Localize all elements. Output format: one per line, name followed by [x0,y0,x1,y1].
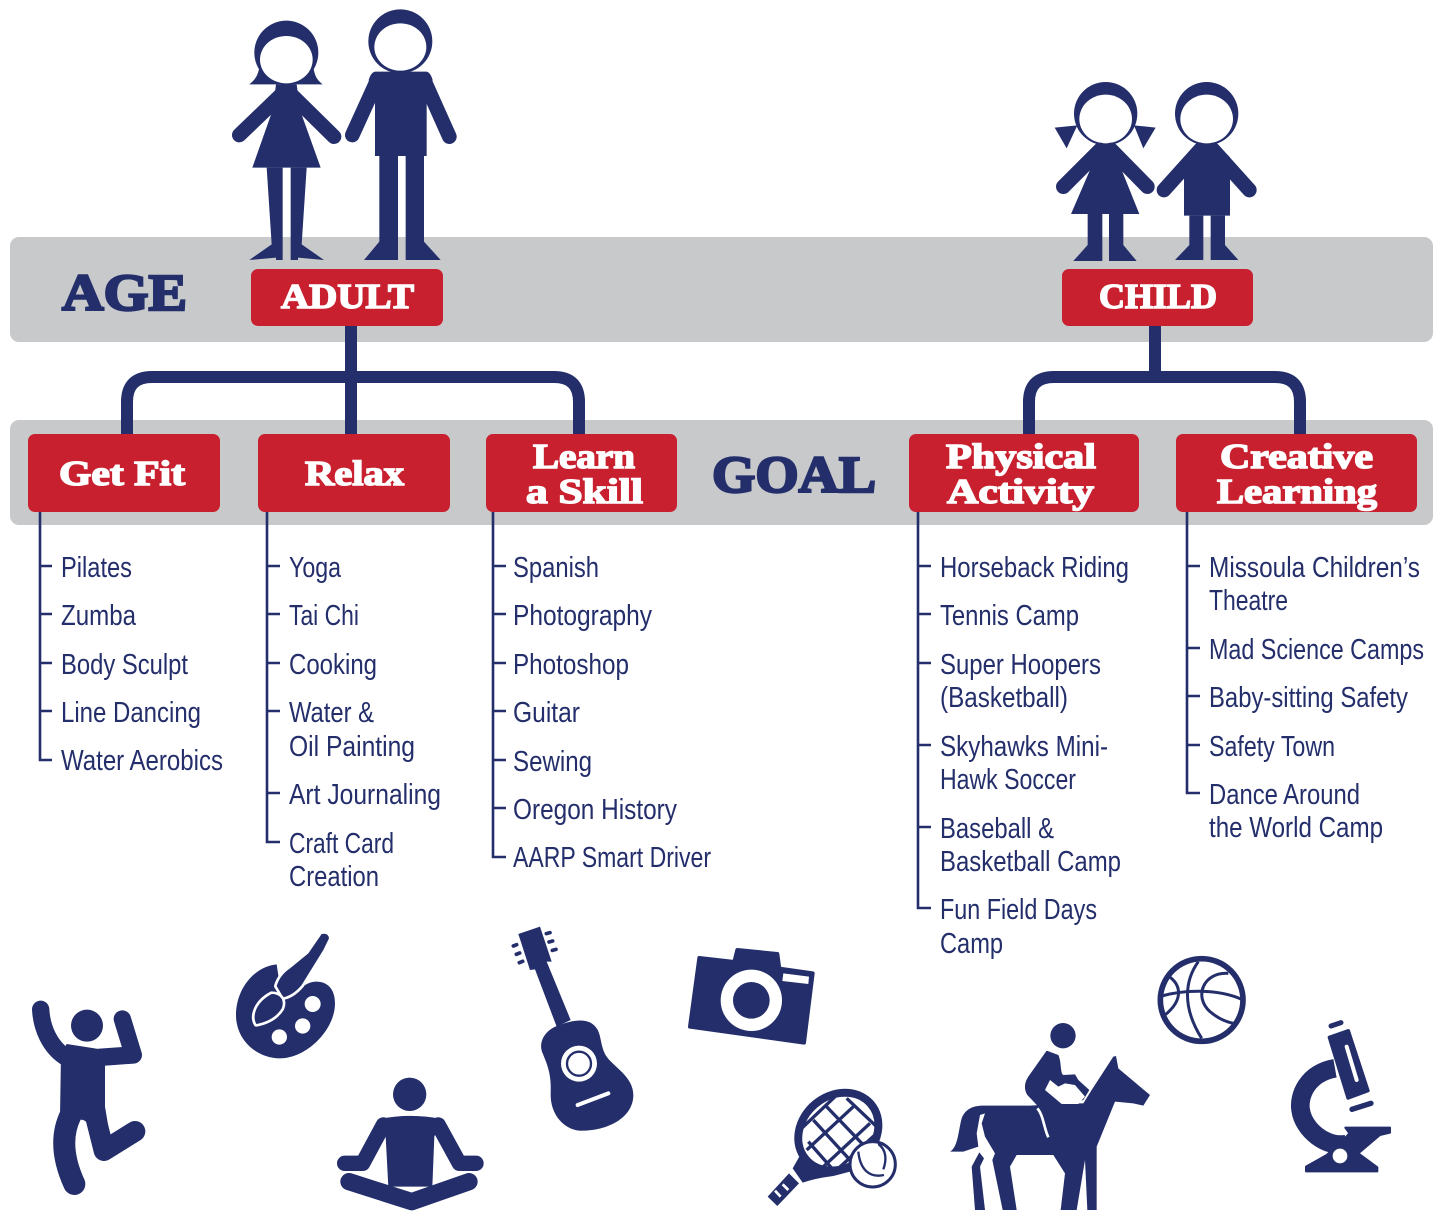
connector: child to goals [1029,326,1300,434]
goal: learn a skill: a Skill [526,472,643,511]
list: relax [267,512,441,893]
list: relax: Cooking [289,649,377,681]
list: creative learning: Dance Around [1209,779,1360,811]
list: learn a skill [493,512,711,874]
list: physical activity: Skyhawks Mini- [940,731,1108,763]
label: child [1062,269,1253,326]
icon: guitar [513,927,633,1131]
list: physical activity: Super Hoopers [940,649,1101,681]
icon: tennis racket and ball [768,1077,895,1206]
list: learn a skill: Photography [513,600,652,632]
goal: relax: Relax [305,454,405,493]
list: relax: Water & [289,697,374,729]
goal: physical activity: Activity [947,472,1095,511]
label: adult [251,269,443,326]
goal: get fit [28,434,220,512]
list: learn a skill: Spanish [513,552,599,584]
label: child: CHILD [1099,277,1217,316]
goal: learn a skill: Learn [533,437,635,476]
list: learn a skill: Oregon History [513,794,677,826]
list: physical activity: Horseback Riding [940,552,1129,584]
icon: camera [690,950,813,1043]
list: creative learning [1187,512,1424,844]
list: learn a skill: Sewing [513,746,592,778]
list: get fit [40,512,223,777]
list: learn a skill: Photoshop [513,649,629,681]
list: physical activity: Hawk Soccer [940,764,1076,796]
list: relax: Yoga [289,552,342,584]
icon: paint palette [236,934,335,1058]
icon: basketball [1160,959,1243,1041]
goal band [10,420,1433,525]
list: physical activity: Fun Field Days [940,894,1097,926]
list: creative learning: Safety Town [1209,731,1335,763]
list: learn a skill: Guitar [513,697,580,729]
label: adult: ADULT [281,277,414,316]
goal: physical activity: Physical [946,437,1096,476]
list: get fit: Pilates [61,552,132,584]
list: get fit: Line Dancing [61,697,201,729]
heading: goal: GOAL [712,447,876,504]
list: get fit: Body Sculpt [61,649,188,681]
heading: age: AGE [62,265,187,322]
list: physical activity: (Basketball) [940,682,1068,714]
list: creative learning: Theatre [1209,585,1288,617]
goal: learn a skill [486,434,677,512]
list: creative learning: Baby-sitting Safety [1209,682,1408,714]
icon: adult woman [239,21,334,260]
list: get fit: Water Aerobics [61,745,223,777]
goal: get fit: Get Fit [59,454,185,493]
icon: jumping person [41,1009,135,1184]
icon: girl [1055,82,1156,261]
list: physical activity: Basketball Camp [940,846,1121,878]
list: relax: Oil Painting [289,731,415,763]
goal: relax [258,434,450,512]
list: learn a skill: AARP Smart Driver [513,842,711,874]
list: creative learning: the World Camp [1209,812,1383,844]
icon: meditating person [345,1078,476,1202]
icon: boy [1164,82,1249,260]
list: physical activity: Baseball & [940,813,1054,845]
list: relax: Craft Card [289,828,394,860]
list: physical activity: Camp [940,928,1003,960]
list: relax: Tai Chi [289,600,359,632]
icon: horse and rider [950,1023,1150,1210]
list: relax: Creation [289,861,379,893]
goal: physical activity [909,434,1139,512]
goal: creative learning [1176,434,1417,512]
list: physical activity [918,512,1129,960]
goal: creative learning: Creative [1220,437,1373,476]
connector: adult to goals [127,326,579,434]
list: physical activity: Tennis Camp [940,600,1079,632]
goal: creative learning: Learning [1217,472,1378,511]
icon: adult man [352,9,449,260]
icon: microscope [1300,1023,1390,1171]
list: relax: Art Journaling [289,779,441,811]
list: get fit: Zumba [61,600,137,632]
age band [10,237,1433,342]
